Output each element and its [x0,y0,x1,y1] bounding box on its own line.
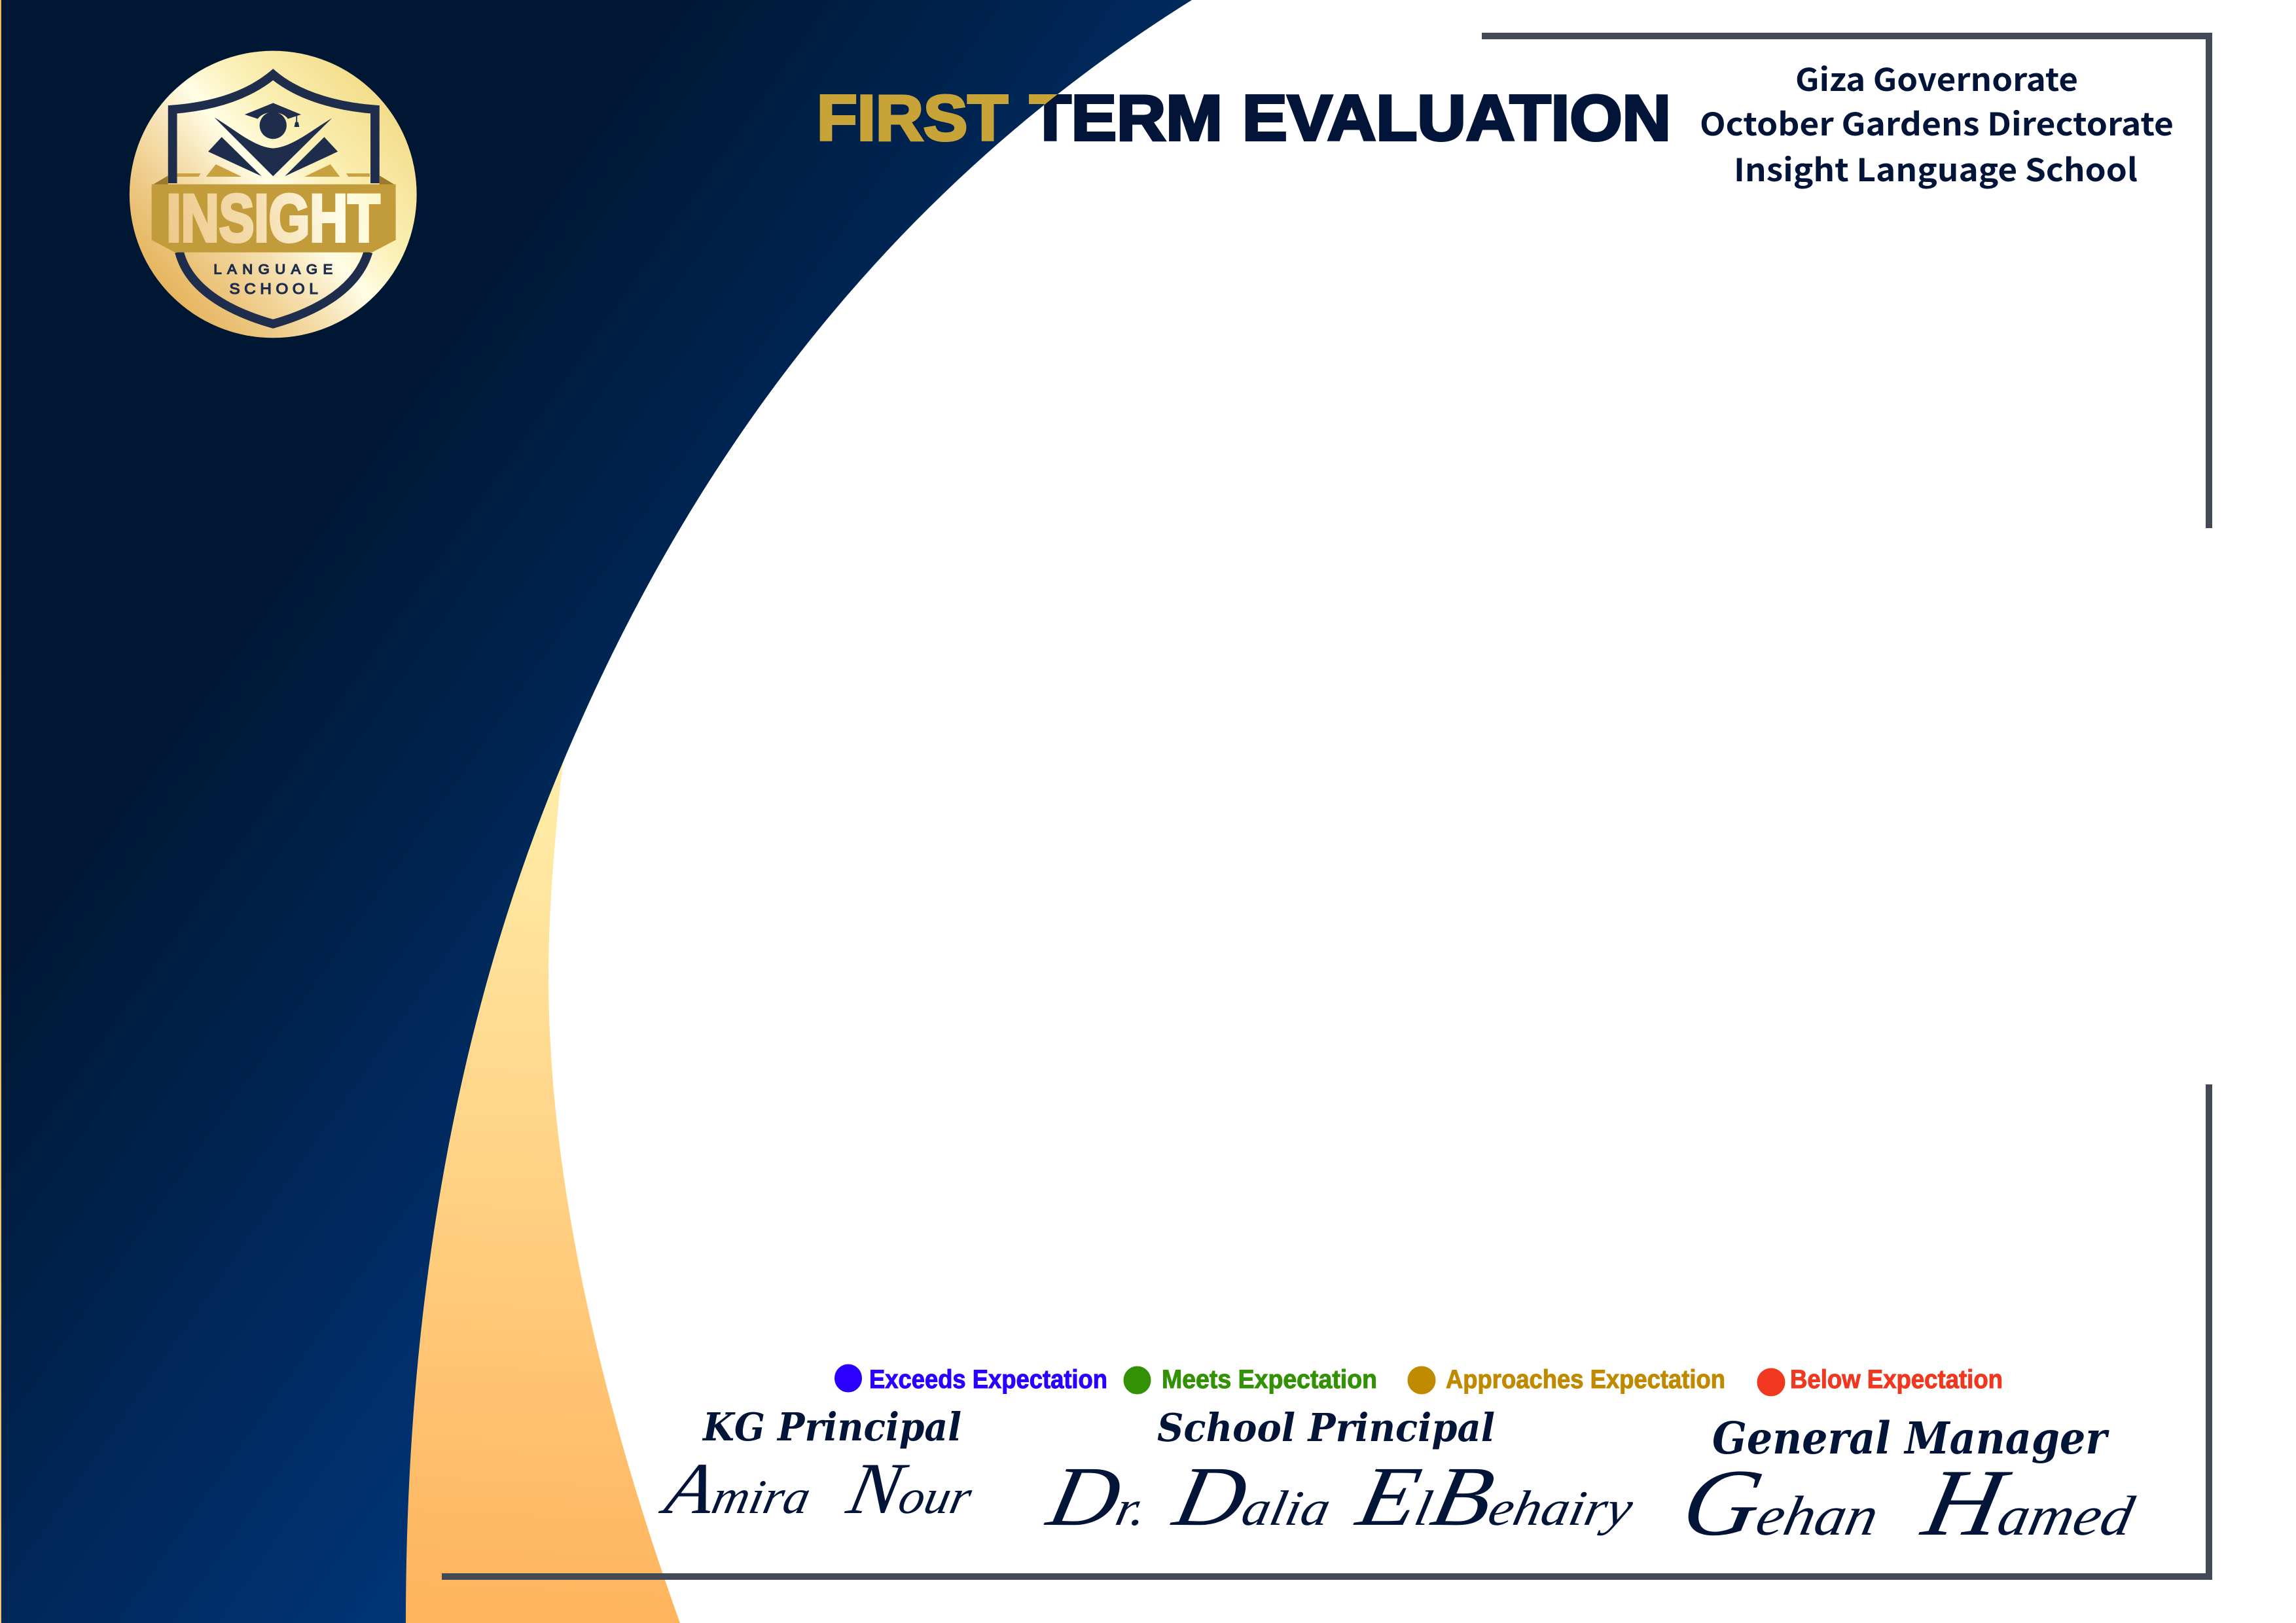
legend: approaches expectation: Approaches Expectation [1446,1365,1725,1394]
LANGUAGE label: LANGUAGE [213,261,332,277]
school name line: Insight Language School [1734,145,2138,190]
title [819,94,1668,142]
title word: TERM: TERM [1030,82,1223,154]
signature: Dr. Dalia El Behairy: Dr. Dalia ElBehairy [1039,1450,1645,1544]
legend: below expectation: Below Expectation [1790,1365,2003,1394]
gold book accents [177,164,370,177]
role: General Manager: General Manager [1712,1412,2109,1464]
legend: exceeds expectation: Exceeds Expectation [869,1365,1107,1394]
legend [835,1364,2003,1396]
signature: Gehan Hamed: Gehan Hamed [1674,1449,2147,1556]
graduate figure icon [208,103,338,176]
title word: T overlap in gold: TERM [1030,82,1223,154]
SCHOOL label: SCHOOL [229,281,318,298]
governorate line: Giza Governorate [1795,54,2078,100]
school information block [1700,54,2174,190]
ribbon banner [152,175,396,253]
gold swoosh [393,762,680,1623]
school logo badge [130,51,417,338]
navy curved panel [0,0,1192,1623]
shield outline [173,75,375,324]
frame: top right bracket [1482,33,2212,528]
badge circle [130,51,417,338]
frame: bottom right bracket [442,1084,2212,1580]
role: School Principal: School Principal [1157,1405,1495,1450]
thin gold left edge [0,0,1,1623]
role: KG Principal: KG Principal [702,1404,961,1450]
legend: meets expectation: Meets Expectation [1162,1365,1377,1394]
signatures block [654,1404,2147,1556]
title word: FIRST: FIRST [817,82,1008,154]
INSIGHT wordmark: INSIGHT [166,181,380,255]
directorate line: October Gardens Directorate [1700,99,2174,145]
title word: EVALUATION: EVALUATION [1242,82,1671,154]
signature: Amira Nour: Amira Nour [654,1448,982,1529]
